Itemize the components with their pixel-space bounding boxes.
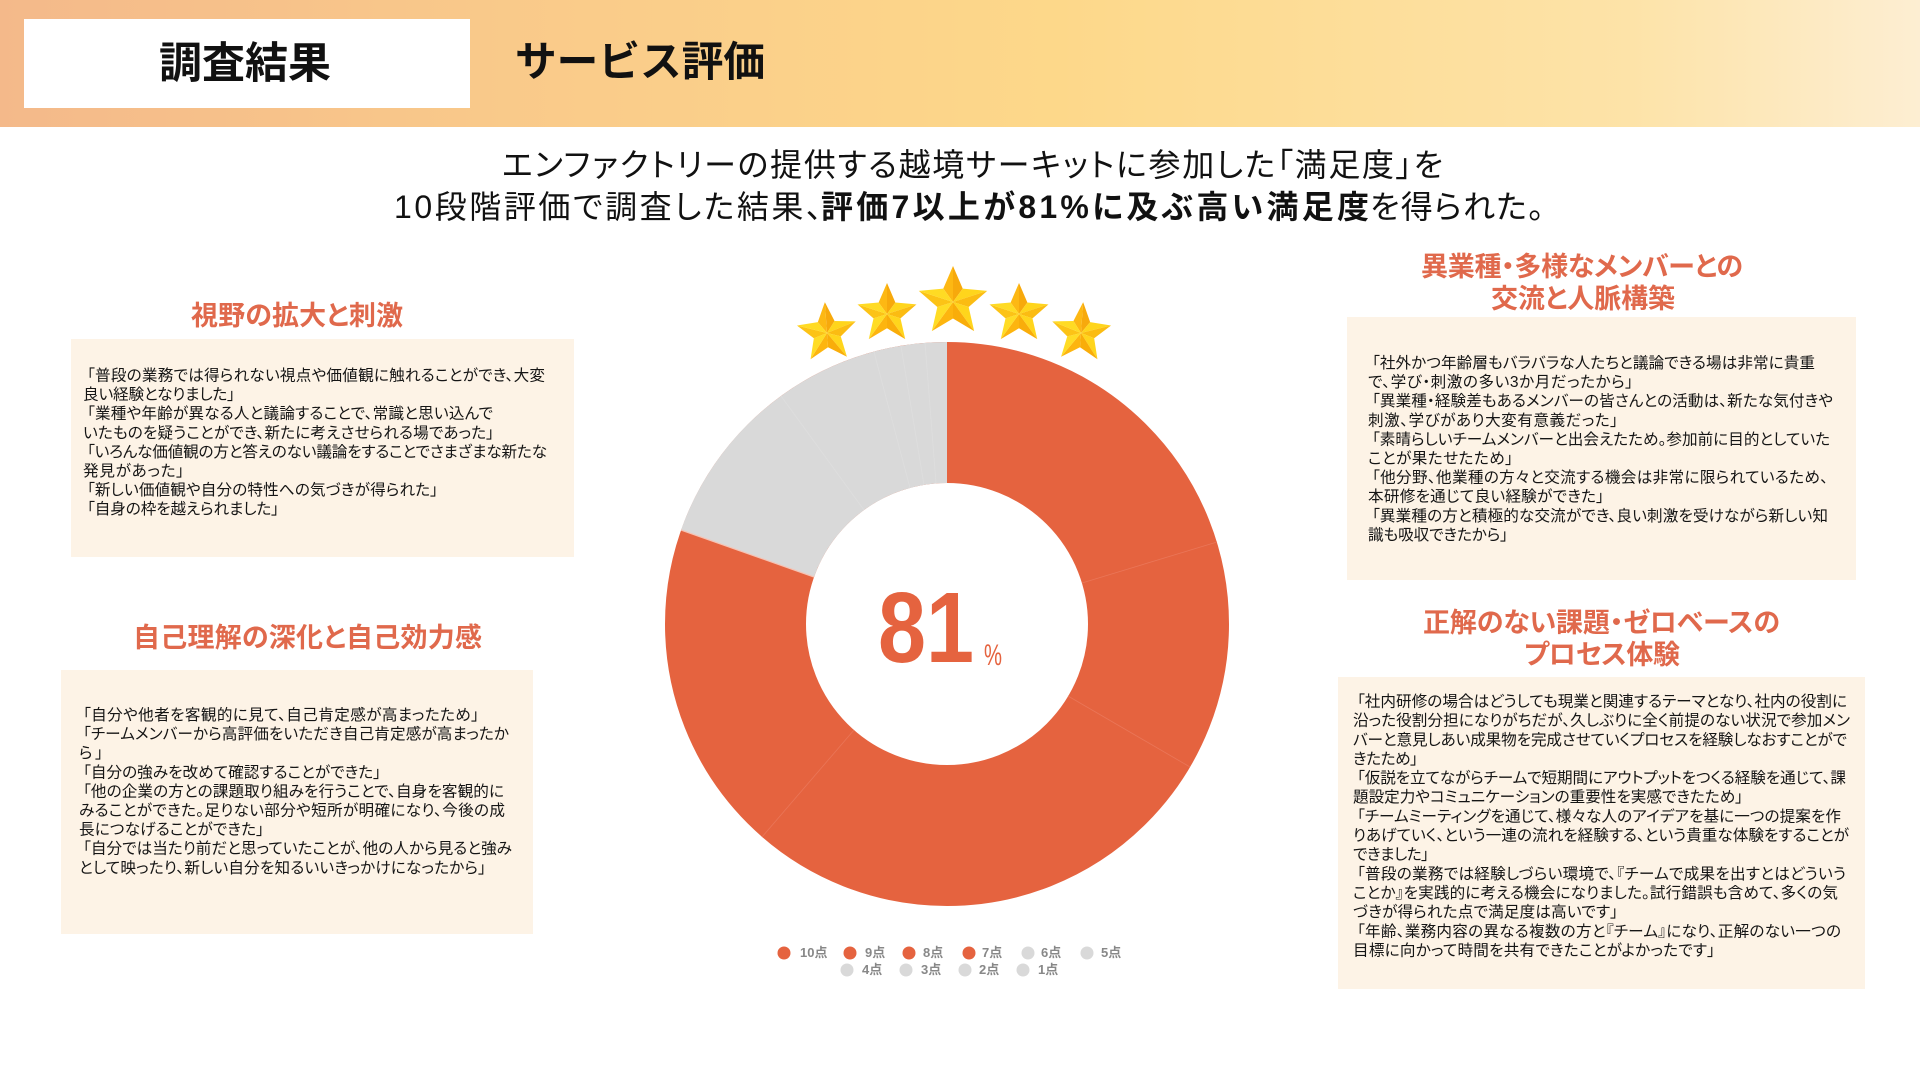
donut chart: [681, 342, 1217, 837]
legend: 7点: [982, 945, 1002, 960]
quotes: 長につなげることができた」: [79, 821, 264, 839]
quotes: [83, 366, 547, 518]
heading: 異業種・多様なメンバーとの交流と人脈構築: 異業種・多様なメンバーとの: [1421, 252, 1743, 282]
legend: 10点: [800, 945, 827, 960]
legend: 4点: [862, 962, 882, 977]
lead text: 10段階評価で調査した結果、: [394, 189, 822, 225]
panel: 正解のない課題: [1338, 677, 1865, 989]
quotes: 「社外かつ年齢層もバラバラな人たちと議論できる場は非常に貴重: [1372, 354, 1815, 372]
legend: 8点: [923, 945, 943, 960]
heading: 視野の拡大と刺激: 視野の拡大と刺激: [191, 301, 403, 331]
quotes: 題設定力やコミュニケーションの重要性を実感できたため」: [1353, 788, 1743, 806]
value: 81%: 81: [878, 572, 974, 684]
quotes: として映ったり、新しい自分を知るいいきっかけになったから」: [79, 859, 486, 877]
quotes: 「仮説を立てながらチームで短期間にアウトプットをつくる経験を通じて、課: [1357, 769, 1846, 787]
quotes: 「いろんな価値観の方と答えのない議論をすることでさまざまな新たな: [87, 442, 547, 461]
quotes: 「普段の業務では経験しづらい環境で、『チームで成果を出すとはどういう: [1357, 865, 1846, 883]
quotes: 良い経験となりました」: [83, 386, 235, 404]
quotes: 「自分では当たり前だと思っていたことが、他の人から見ると強み: [83, 840, 512, 858]
legend: 6点: [1041, 945, 1061, 960]
quotes: 「普段の業務では得られない視点や価値観に触れることができ、大変: [87, 366, 545, 384]
quotes: 「業種や年齢が異なる人と議論することで、常識と思い込んで: [87, 405, 493, 423]
quotes: りあげていく、という一連の流れを経験する、という貴重な体験をすることが: [1353, 826, 1850, 844]
quotes: 沿った役割分担になりがちだが、久しぶりに全く前提のない状況で参加メン: [1353, 712, 1850, 730]
quotes: きたため」: [1353, 750, 1418, 768]
quotes: 「他の企業の方との課題取り組みを行うことで、自身を客観的に: [83, 782, 504, 800]
heading: 異業種・多様なメンバーとの交流と人脈構築: 交流と人脈構築: [1491, 284, 1675, 314]
grey segment: 6点以下: [681, 342, 947, 577]
lead text: [394, 147, 1544, 225]
quotes: 「新しい価値観や自分の特性への気づきが得られた」: [87, 481, 438, 499]
panel: 視野の拡大と刺激: [71, 339, 574, 557]
quotes: ことが果たせたため」: [1368, 450, 1513, 468]
quotes: [79, 706, 512, 877]
quotes: 「自身の枠を越えられました」: [87, 500, 279, 518]
legend: 2点: [979, 962, 999, 977]
legend: [778, 945, 1121, 977]
lead text: 評価7以上が81%に及ぶ高い満足度: [821, 189, 1369, 225]
quotes: 「チームミーティングを通じて、様々な人のアイデアを基に一つの提案を作: [1357, 806, 1841, 825]
quotes: バーと意見しあい成果物を完成させていくプロセスを経験しなおすことがで: [1353, 731, 1847, 749]
quotes: 識も吸収できたから」: [1368, 526, 1508, 544]
legend: 3点: [921, 962, 941, 977]
legend: 5点: [1101, 945, 1121, 960]
heading: 正解のない課題・ゼロベースのプロセス体験: プロセス体験: [1524, 640, 1680, 670]
quotes: 「社内研修の場合はどうしても現業と関連するテーマとなり、社内の役割に: [1357, 692, 1847, 710]
quotes: 目標に向かって時間を共有できたことがよかったです」: [1353, 941, 1715, 959]
heading: 自己理解の深化と自己効力感: 自己理解の深化と自己効力感: [133, 623, 482, 653]
header section title: サービス評価: [515, 38, 765, 85]
stars: [795, 266, 1113, 360]
lead text: エンファクトリーの提供する越境サーキットに参加した「満足度」を: [502, 147, 1443, 183]
quotes: みることができた。足りない部分や短所が明確になり、今後の成: [79, 802, 505, 820]
quotes: づきが得られた点で満足度は高いです」: [1353, 903, 1618, 921]
quotes: 「年齢、業務内容の異なる複数の方と『チーム』になり、正解のない一つの: [1357, 922, 1841, 940]
header band: [0, 0, 1920, 127]
quotes: 「自分の強みを改めて確認することができた」: [83, 763, 381, 781]
quotes: 本研修を通じて良い経験ができた」: [1368, 488, 1604, 506]
panel: 自己理解の深化と自己効力感: [61, 670, 533, 934]
quotes: [1353, 692, 1850, 959]
quotes: 発見があった」: [83, 462, 184, 480]
legend: 1点: [1038, 962, 1058, 977]
quotes: いたものを疑うことができ、新たに考えさせられる場であった」: [83, 424, 494, 442]
quotes: [1368, 354, 1833, 544]
panel: 異業種・多様なメンバー: [1347, 317, 1856, 580]
header label box: [24, 19, 470, 108]
quotes: で、学び・刺激の多い3か月だったから」: [1368, 373, 1633, 391]
value: 81%: %: [984, 639, 1002, 672]
heading: 正解のない課題・ゼロベースのプロセス体験: [1423, 607, 1780, 670]
segment separators: [762, 542, 1217, 837]
quotes: 「自分や他者を客観的に見て、自己肯定感が高まったため」: [83, 706, 479, 724]
lead text: を得られた。: [1370, 189, 1544, 225]
quotes: 「異業種の方と積極的な交流ができ、良い刺激を受けながら新しい知: [1372, 507, 1828, 525]
quotes: 「他分野、他業種の方々と交流する機会は非常に限られているため、: [1372, 469, 1828, 487]
heading: 正解のない課題・ゼロベースのプロセス体験: 正解のない課題・ゼロベースの: [1423, 607, 1780, 638]
legend: 9点: [865, 945, 885, 960]
quotes: できました」: [1353, 846, 1429, 864]
quotes: 「チームメンバーから高評価をいただき自己肯定感が高まったか: [83, 725, 510, 743]
header label box: 調査結果: [159, 40, 331, 88]
quotes: 「素晴らしいチームメンバーと出会えたため。参加前に目的としていた: [1372, 430, 1830, 448]
quotes: ことか』を実践的に考える機会になりました。試行錯誤も含めて、多くの気: [1353, 884, 1838, 902]
quotes: 「異業種・経験差もあるメンバーの皆さんとの活動は、新たな気付きや: [1372, 392, 1833, 410]
quotes: ら」: [79, 745, 103, 762]
heading: 異業種・多様なメンバーとの交流と人脈構築: [1421, 252, 1743, 314]
quotes: 刺激、学びがあり大変有意義だった」: [1368, 411, 1618, 429]
